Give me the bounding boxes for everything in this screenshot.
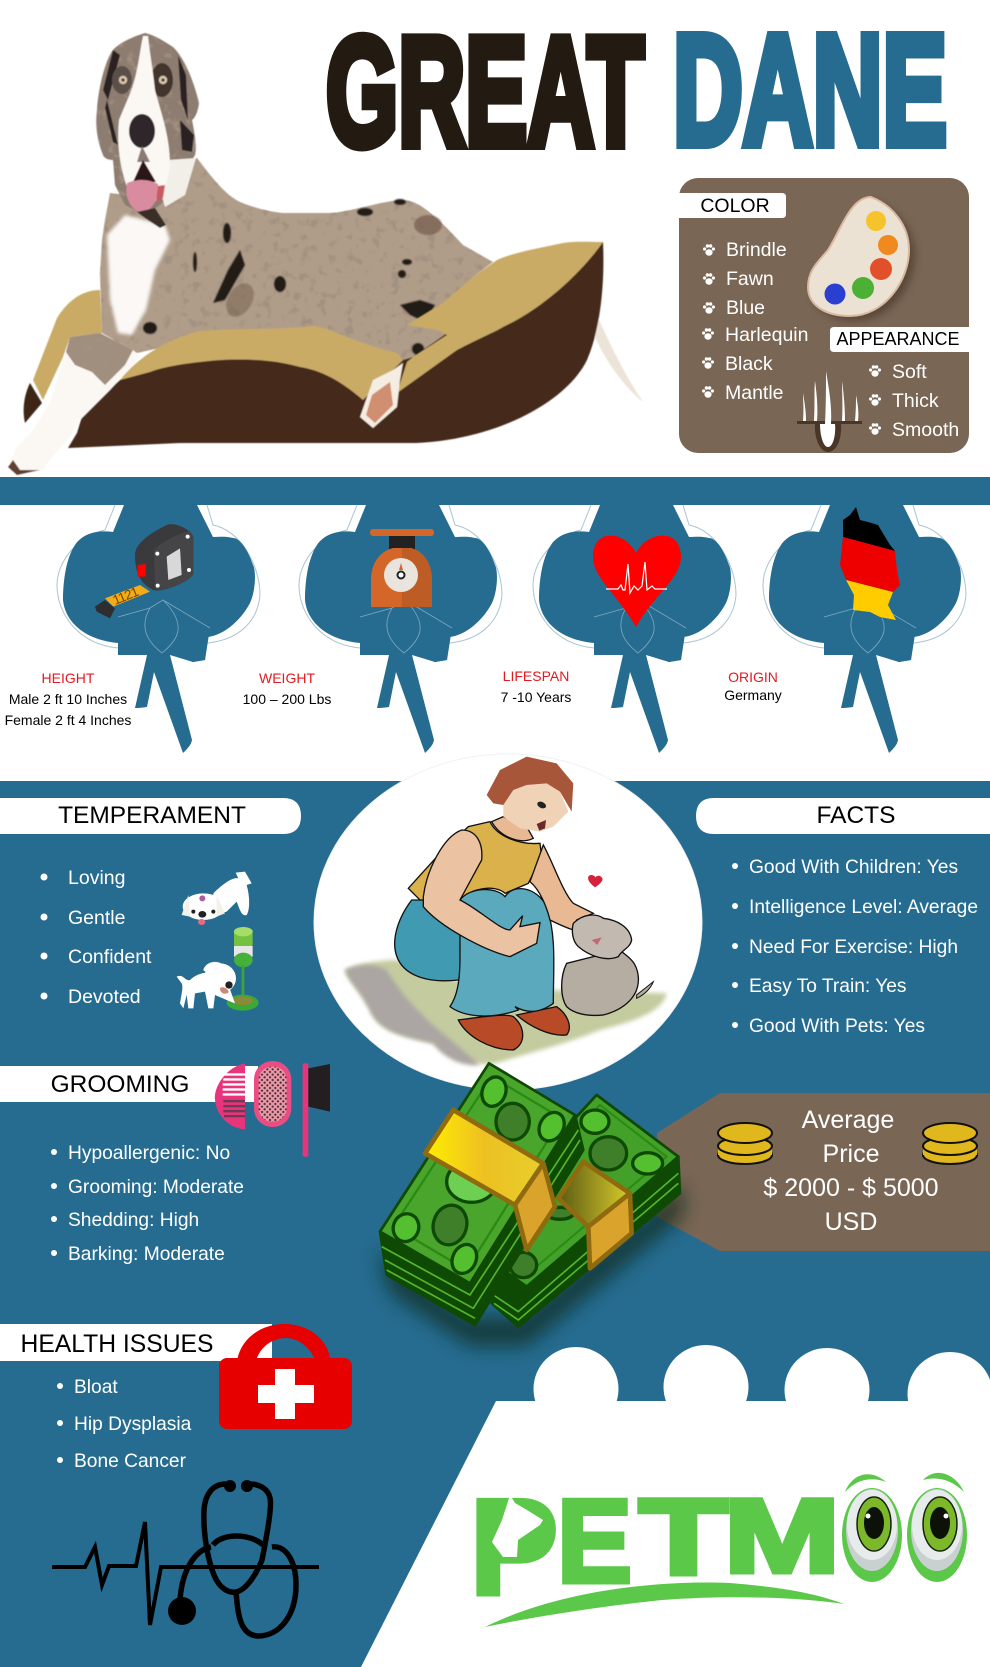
left band [425,1110,555,1250]
lifespan label: LIFESPAN [503,668,569,684]
nose [129,114,155,148]
weight label: 100 – 200 Lbs [243,691,331,707]
appearance list [869,361,959,441]
height label: HEIGHT [42,670,95,686]
logo letters: E [557,1475,632,1608]
price tag [657,1093,990,1251]
origin label [724,669,782,703]
label: color [660,193,786,218]
eye left [842,1474,902,1582]
puppy head [572,915,632,959]
temperament list: Devoted [68,986,141,1008]
toes shading [8,460,40,475]
dog silhouette in P [492,1495,543,1557]
ribbon badge [763,505,966,753]
color list [702,239,808,404]
icon: playful puppy [182,872,252,925]
icon: puppy at feeder [177,927,259,1011]
temperament list [40,867,152,1008]
mouth [133,160,156,182]
arm and hand [423,830,540,957]
grooming [0,1061,330,1265]
appearance list: Thick [892,390,939,412]
ribbon badge [299,505,502,753]
heading pill: FACTS [817,802,895,829]
origin label: Germany [724,687,782,703]
heading pill [0,798,301,834]
grooming list [51,1143,244,1265]
bed base [68,242,603,448]
color list: Fawn [726,268,774,290]
stat: origin [724,505,966,753]
height label [5,670,131,728]
heading pill [696,798,990,834]
temperament [0,798,301,1011]
health list [57,1377,192,1472]
dog head [96,33,199,215]
right stack [492,1095,680,1327]
facts [696,798,990,1037]
body markings [143,199,442,355]
panel background [679,178,969,453]
stat: weight [243,505,502,753]
fill of P counter [492,1510,536,1556]
ribbon badge [533,505,736,753]
facts list: Good With Pets: Yes [749,1016,925,1037]
white blaze and muzzle [118,36,170,205]
icon: stethoscope and heartbeat [52,1480,319,1636]
bottom white panel [361,1345,990,1667]
grooming list: Hypoallergenic: No [68,1143,230,1164]
temperament list: Loving [68,867,125,889]
appearance list: Soft [892,361,927,383]
icon: coins left [718,1123,772,1164]
price text: $ 2000 - $ 5000 [763,1174,939,1202]
height label: Female 2 ft 4 Inches [5,712,131,728]
facts list: Intelligence Level: Average [749,897,978,918]
face [503,783,568,832]
bed tan right pillow [397,242,603,393]
heading pill: HEALTH ISSUES [21,1331,213,1358]
price text: Average [802,1106,894,1134]
icon: heart with pulse [593,535,681,627]
price text [763,1106,939,1236]
facts list: Easy To Train: Yes [749,976,907,997]
color list: Mantle [725,382,784,404]
icon: medical kit [219,1324,352,1429]
eye patches [112,66,132,94]
stat: lifespan [501,505,736,753]
temperament list: Confident [68,946,152,968]
shirt [408,822,542,900]
logo letters: P [470,1471,558,1623]
icon: germany flag map [840,507,900,620]
icon: coins right [923,1123,977,1164]
ear markings [103,50,194,152]
facts list [732,857,978,1037]
lifespan label: 7 -10 Years [501,689,571,705]
bed tan front [120,326,403,400]
label: appearance [830,327,985,352]
weight label: WEIGHT [259,670,315,686]
icon: paint palette [808,197,915,321]
eye right [907,1473,967,1582]
right band [558,1162,632,1268]
stat: height [5,505,260,753]
circle [314,754,702,1090]
height label: Male 2 ft 10 Inches [9,691,127,707]
bed tan left [33,290,102,400]
child and puppy drawing [345,757,667,1065]
weight label [243,670,331,707]
icon: tape measure: 1121 [110,584,141,608]
main blue background [0,781,990,1667]
appearance list: Smooth [892,419,959,441]
heading pill [0,1066,258,1102]
grooming list: Grooming: Moderate [68,1177,244,1198]
dog body [100,158,493,360]
shadow [377,1183,683,1347]
price text: USD [825,1208,877,1236]
ribbon badge [57,505,260,753]
temperament list: Gentle [68,907,125,929]
neck [492,817,533,841]
health issues [0,1324,352,1472]
heading pill: TEMPERAMENT [58,802,246,829]
white chest [107,215,170,335]
logo letters: M [724,1478,840,1595]
facts list: Need For Exercise: High [749,937,958,958]
color list: Harlequin [725,324,808,346]
label: color: COLOR [700,195,770,217]
lifespan label [501,668,571,705]
logo letters: T [639,1476,728,1597]
heading pill [0,1324,272,1361]
collar [137,208,166,228]
photo: great dane on bed [8,33,643,475]
icon: scale [370,529,434,607]
neck white patch [160,158,196,207]
icon: hair follicle [797,371,862,452]
color list: Blue [726,297,765,319]
heading pill: GROOMING [51,1071,189,1098]
grooming list: Barking: Moderate [68,1244,225,1265]
health list: Bone Cancer [74,1451,187,1472]
icon: money stacks [377,1063,683,1347]
hair [487,757,573,812]
left stack [380,1063,583,1325]
shoes [458,1015,523,1050]
swoosh [485,1583,844,1627]
color list: Brindle [726,239,787,261]
dog tail [595,315,643,402]
icon: comb and brushes [215,1061,330,1157]
logo: petmoo [470,1471,967,1627]
health list: Bloat [74,1377,118,1398]
puppy tail [637,982,653,998]
jeans hip [395,900,483,981]
title: GREAT [326,5,644,178]
icon: tape measure [95,524,193,618]
bed left corner [24,383,42,423]
jeans legs [450,889,554,1016]
price text: Price [823,1140,879,1168]
heart [588,875,603,887]
blue band [0,477,990,505]
origin label: ORIGIN [728,669,778,685]
front leg [8,333,140,475]
reaching arm [530,845,593,930]
paw on bed [360,363,403,428]
eyes [119,76,167,84]
grooming list: Shedding: High [68,1210,199,1231]
tag shape [657,1093,990,1251]
logo letters [470,1471,840,1623]
panel: color and appearance [660,178,985,453]
ground shading [345,960,667,1064]
facts list: Good With Children: Yes [749,857,958,878]
tongue [126,180,158,212]
puppy body [562,950,638,1015]
color list: Black [725,353,773,375]
label: appearance: APPEARANCE [836,329,960,349]
health list: Hip Dysplasia [74,1414,192,1435]
circle illustration: child petting puppy [314,754,702,1090]
